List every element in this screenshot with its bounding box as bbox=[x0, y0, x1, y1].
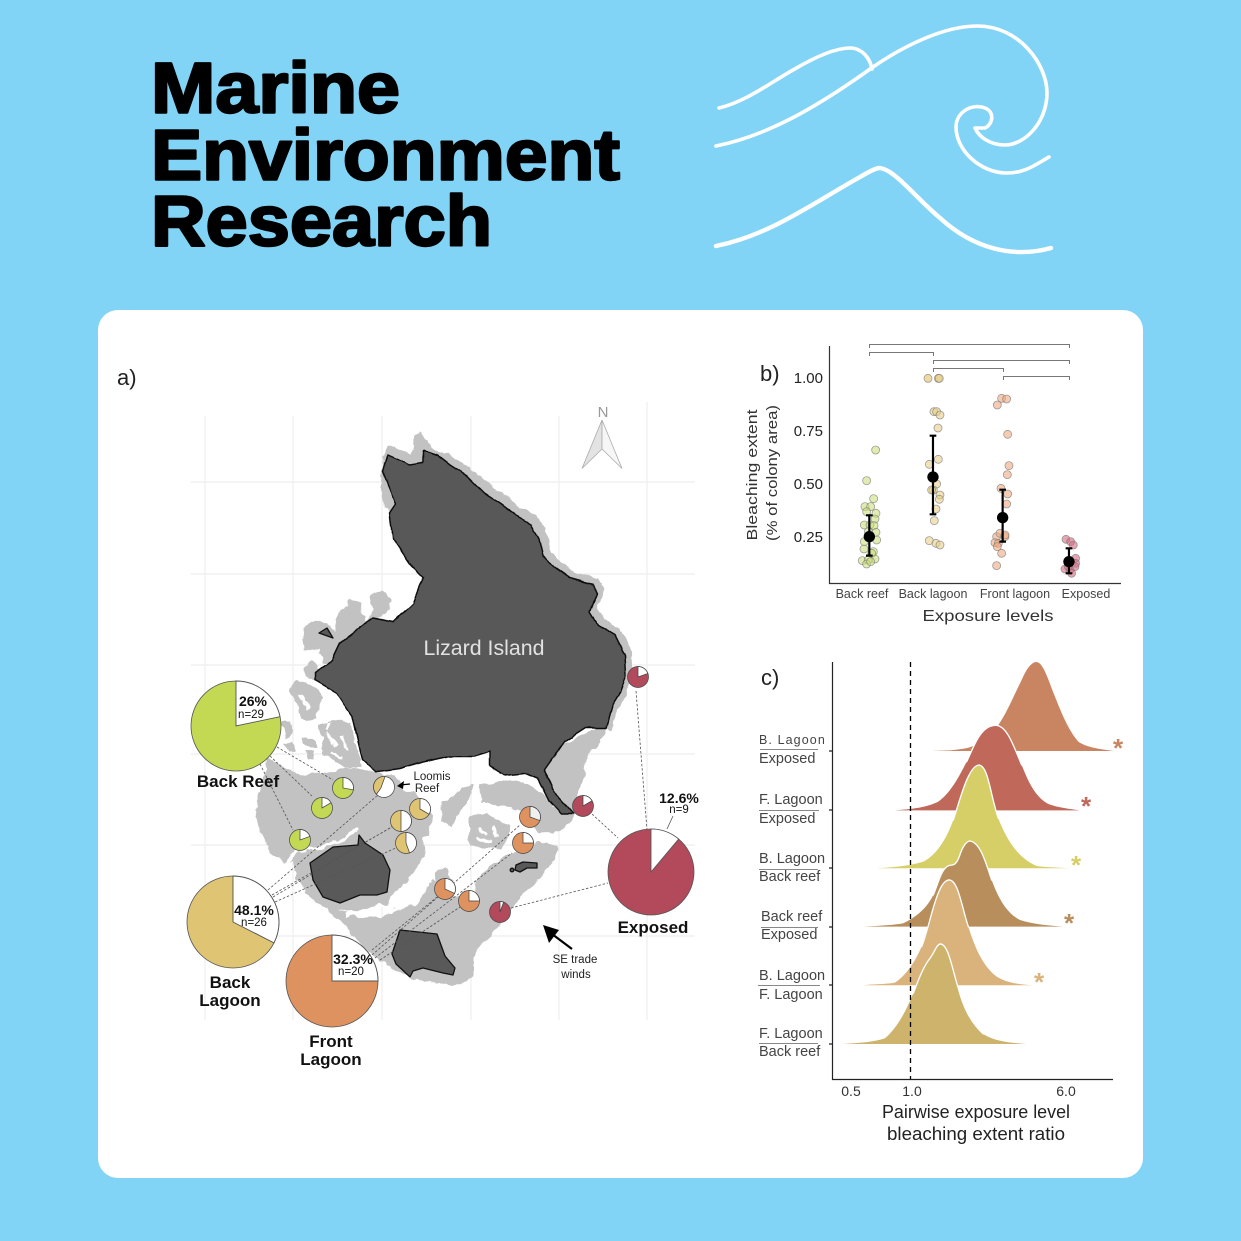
pair labels: Back reef bbox=[759, 1044, 821, 1060]
arrow: SE trade winds: SE trade bbox=[553, 954, 597, 966]
significance stars: * bbox=[1071, 850, 1082, 880]
arrow: SE trade winds: winds bbox=[560, 969, 591, 981]
x axis title bbox=[882, 1102, 1070, 1144]
Loomis Reef label and arrow: Loomis bbox=[413, 771, 451, 783]
compass bbox=[582, 404, 622, 468]
x tick labels: 0.5 bbox=[841, 1083, 861, 1099]
pair labels: Exposed bbox=[759, 751, 815, 767]
pair labels: Exposed bbox=[761, 927, 817, 943]
reef areas bbox=[256, 432, 632, 986]
pie labels: Back Reef bbox=[197, 772, 279, 791]
pie: Front Lagoon 32.3% bbox=[286, 935, 378, 1027]
x axis title: Exposure levels bbox=[922, 608, 1054, 625]
panel a: map bbox=[117, 365, 699, 1069]
arrow: SE trade winds bbox=[543, 925, 597, 981]
pair labels: B. Lagoon bbox=[759, 851, 825, 867]
label b): b) bbox=[760, 361, 780, 386]
x axis title: Pairwise exposure level bbox=[882, 1102, 1070, 1122]
x tick labels: 6.0 bbox=[1056, 1083, 1076, 1099]
small site pies: front lagoon bbox=[434, 806, 541, 912]
small islands bbox=[310, 628, 537, 977]
x axis labels bbox=[836, 587, 1110, 601]
compass: N bbox=[598, 404, 608, 421]
label c): c) bbox=[761, 665, 779, 690]
axes bbox=[830, 346, 1121, 584]
x axis title: bleaching extent ratio bbox=[887, 1124, 1065, 1144]
pie labels: 26% bbox=[239, 693, 268, 709]
panel c: ridgeline plot bbox=[758, 662, 1124, 1144]
y axis title: (% of colony area) bbox=[765, 405, 781, 541]
significance stars: * bbox=[1034, 967, 1045, 997]
title: Environment bbox=[151, 116, 620, 196]
x tick labels bbox=[841, 1083, 1076, 1099]
pie labels: n=26 bbox=[241, 917, 267, 929]
y axis tick labels: 1.00 bbox=[794, 370, 823, 387]
icon: wave bbox=[716, 26, 1051, 252]
x axis labels: Exposed bbox=[1062, 587, 1110, 601]
pair labels: F. Lagoon bbox=[759, 987, 823, 1003]
small site pies: back reef bbox=[290, 778, 354, 850]
pie labels: n=29 bbox=[238, 709, 264, 721]
significance stars: * bbox=[1064, 908, 1075, 938]
pie labels: Lagoon bbox=[199, 991, 261, 1010]
pie: Back Reef 26% bbox=[191, 681, 281, 771]
reference line at 1.0 bbox=[910, 662, 912, 1079]
pie: Exposed 12.6% bbox=[608, 829, 694, 915]
pair labels: B. Lagoon bbox=[759, 968, 825, 984]
leader lines bbox=[260, 691, 673, 960]
density ridges bbox=[843, 662, 1113, 1044]
small site pies: back lagoon bbox=[373, 776, 430, 854]
y axis tick labels: 0.50 bbox=[794, 476, 823, 493]
significance stars: * bbox=[1113, 733, 1124, 763]
label a): a) bbox=[117, 365, 137, 390]
pie labels: 32.3% bbox=[333, 951, 373, 967]
pair labels: B. Lagoon bbox=[759, 733, 826, 747]
pie labels: n=20 bbox=[338, 966, 364, 978]
significance brackets bbox=[870, 344, 1070, 380]
title: Research bbox=[151, 182, 492, 262]
island label: Lizard Island bbox=[424, 636, 544, 660]
pair labels: Exposed bbox=[759, 811, 815, 827]
main island bbox=[315, 450, 626, 814]
y axis tick labels: 0.75 bbox=[794, 423, 823, 440]
significance stars bbox=[1034, 733, 1124, 997]
title bbox=[151, 50, 620, 262]
x axis labels: Front lagoon bbox=[980, 587, 1050, 601]
pie labels: 48.1% bbox=[234, 902, 274, 918]
pie labels: Back bbox=[210, 973, 251, 992]
y axis tick labels bbox=[794, 370, 823, 546]
white channels in reef bbox=[283, 695, 497, 915]
pie labels bbox=[197, 693, 699, 1069]
pair labels bbox=[759, 733, 826, 1060]
pair labels: Back reef bbox=[761, 909, 823, 925]
pie labels: Lagoon bbox=[300, 1050, 362, 1069]
Loomis Reef label and arrow: Reef bbox=[415, 783, 440, 795]
pie labels: Exposed bbox=[618, 918, 688, 937]
x axis labels: Back reef bbox=[836, 587, 889, 601]
scatter points bbox=[858, 374, 1080, 577]
x tick labels: 1.0 bbox=[902, 1083, 922, 1099]
pair label dividers bbox=[758, 750, 820, 1044]
map grid bbox=[191, 402, 695, 1020]
panel: white card bbox=[98, 310, 1143, 1178]
y axis title bbox=[745, 405, 781, 541]
pair labels: F. Lagoon bbox=[759, 1026, 823, 1042]
x axis labels: Back lagoon bbox=[899, 587, 967, 601]
panel b: bleaching extent scatter bbox=[745, 344, 1121, 625]
pie: Back Lagoon 48.1% bbox=[187, 876, 279, 968]
y axis tick labels: 0.25 bbox=[794, 529, 823, 546]
pie labels: n=9 bbox=[669, 804, 689, 816]
pie labels: 12.6% bbox=[659, 790, 699, 806]
title: Marine bbox=[151, 50, 400, 128]
means and error bars bbox=[864, 436, 1075, 573]
y axis title: Bleaching extent bbox=[745, 410, 761, 540]
axes bbox=[829, 662, 1113, 1080]
significance stars: * bbox=[1081, 791, 1092, 821]
pair labels: F. Lagoon bbox=[759, 792, 823, 808]
pair labels: Back reef bbox=[759, 869, 821, 885]
small site pies: exposed bbox=[490, 666, 648, 922]
Loomis Reef label and arrow bbox=[397, 771, 451, 795]
pie labels: Front bbox=[309, 1032, 353, 1051]
